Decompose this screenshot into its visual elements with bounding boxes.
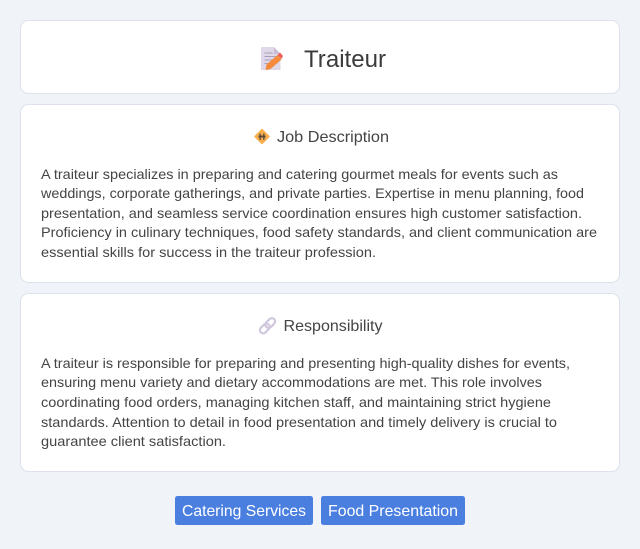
text block: job description: Proficiency in culinary techniques, food safety standards, and client communication are [41, 224, 597, 240]
text block: responsibility [41, 355, 570, 449]
tag: food presentation: Food Presentation [328, 503, 458, 520]
text block: job description [40, 166, 597, 260]
heading: job description: Job Description [277, 129, 389, 146]
icon: document with pencil [261, 47, 283, 70]
text block: job description: presentation, and seamless service coordination ensures high customer satisfaction. [41, 205, 582, 221]
text block: responsibility: A traiteur is responsible for preparing and presenting high-quality dishes for events, [41, 355, 570, 371]
tag: catering services [175, 496, 313, 525]
text block: responsibility: ensuring menu variety and dietary accommodations are met. This role involves [41, 374, 542, 390]
text block: job description: A traiteur specializes in preparing and catering gourmet meals for events such as [41, 166, 558, 182]
heading: responsibility: Responsibility [284, 318, 382, 335]
panel: job description [20, 104, 620, 282]
icon: orange diamond sign [255, 130, 269, 144]
text block: responsibility: standards. Attention to detail in food presentation and timely delivery is crucial to [41, 414, 557, 430]
icon: chain link [259, 317, 276, 335]
text block: job description: weddings, corporate gatherings, and private parties. Expertise in menu planning, food [40, 185, 584, 201]
panel: responsibility [20, 294, 620, 472]
text block: job description: essential skills for success in the traiteur profession. [41, 244, 376, 260]
text block: responsibility: guarantee client satisfaction. [41, 433, 226, 449]
tag: food presentation [321, 496, 465, 525]
panel: title card [20, 20, 620, 94]
title: Traiteur [304, 46, 386, 73]
text block: responsibility: coordinating food orders, managing kitchen staff, and maintaining strict hygiene [41, 394, 551, 410]
tag: catering services: Catering Services [182, 503, 306, 520]
